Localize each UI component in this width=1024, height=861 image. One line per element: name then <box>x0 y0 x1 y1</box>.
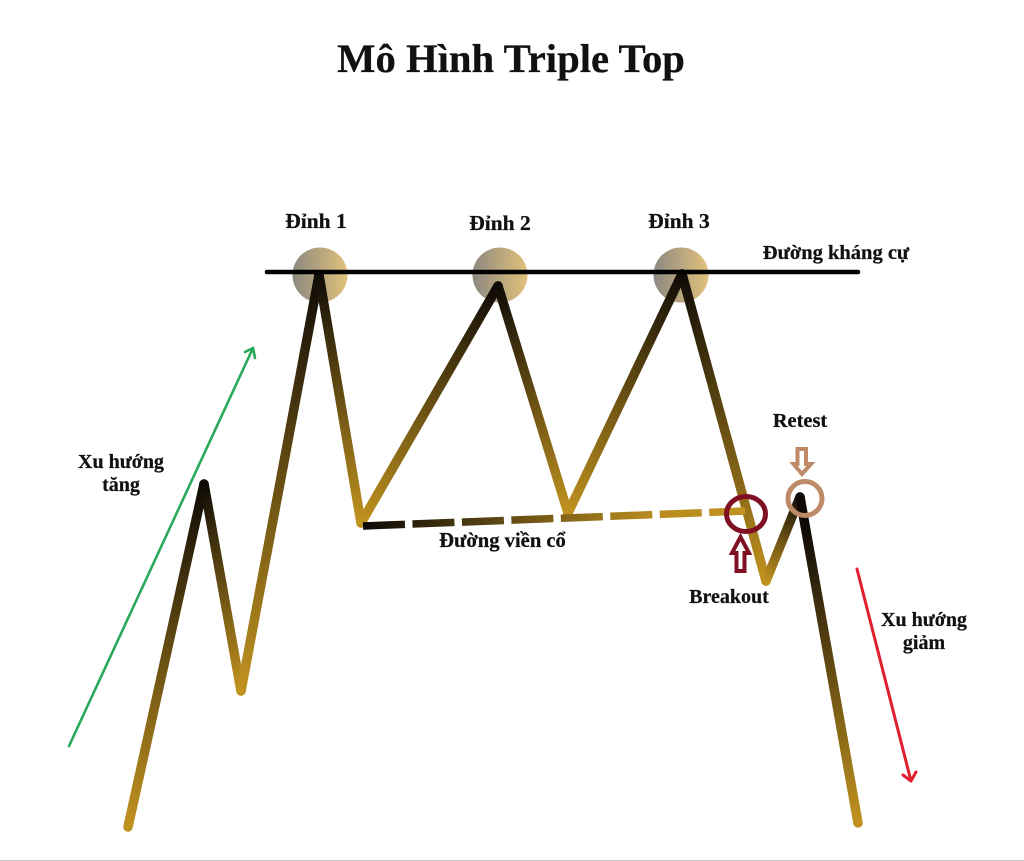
resistance line <box>267 270 858 274</box>
peak highlight circles <box>292 248 708 302</box>
title: Mô Hình Triple Top <box>337 36 685 81</box>
breakout label: Breakout <box>689 586 769 608</box>
neckline label: Đường viền cổ <box>439 530 566 552</box>
downtrend label: Xu hướng <box>881 609 967 631</box>
downtrend arrow <box>857 569 916 781</box>
uptrend arrow <box>69 348 255 746</box>
retest circle <box>788 482 822 516</box>
peak labels <box>285 209 710 235</box>
retest label: Retest <box>773 410 827 432</box>
breakout circle <box>726 496 766 532</box>
peak labels: Đỉnh 3 <box>648 209 710 233</box>
neckline dashed <box>363 511 745 526</box>
downtrend label: giảm <box>903 632 945 654</box>
peak labels: Đỉnh 2 <box>469 211 531 235</box>
retest arrow <box>794 449 811 474</box>
uptrend label: tăng <box>102 474 140 496</box>
resistance label: Đường kháng cự <box>763 242 910 264</box>
price line: triple top pattern <box>128 274 858 827</box>
peak labels: Đỉnh 1 <box>285 209 347 233</box>
bottom edge line <box>0 860 1024 861</box>
breakout arrow <box>732 537 749 571</box>
uptrend label: Xu hướng <box>78 451 164 473</box>
